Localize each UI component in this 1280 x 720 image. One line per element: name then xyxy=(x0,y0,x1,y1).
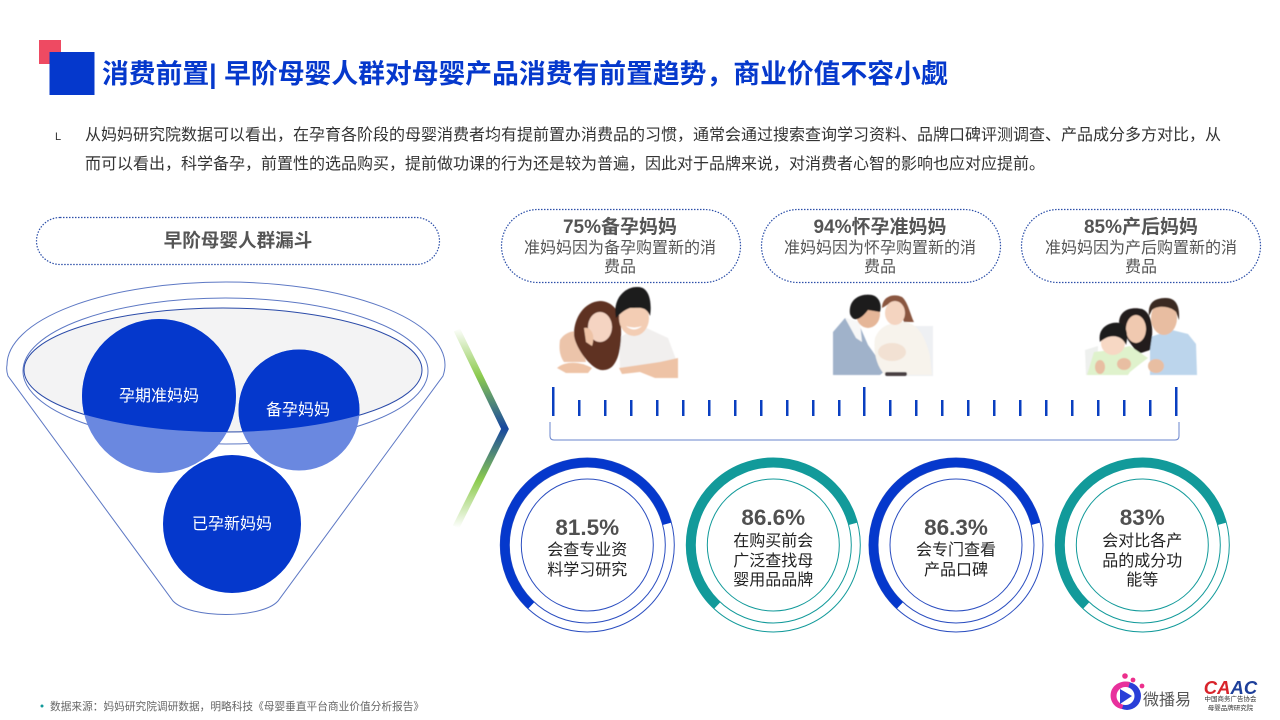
funnel middle rim xyxy=(23,298,428,444)
ring stat: 86.6%: 广泛查找母 xyxy=(733,552,813,570)
arrow: gradient chevron xyxy=(456,330,505,527)
circle: 备孕妈妈 xyxy=(238,350,360,470)
ring stat: 83%: 能等 xyxy=(1126,571,1158,589)
panel: funnel heading pill xyxy=(36,218,440,264)
ring stat: 86.3% xyxy=(869,458,1043,632)
ring stat: 86.3%: 86.3% xyxy=(924,515,988,540)
ring stat: 83%: 83% xyxy=(1120,505,1165,530)
callout: 85%产后妈妈: 85%产后妈妈 xyxy=(1084,216,1198,238)
ring stat: 81.5%: 料学习研究 xyxy=(547,561,627,579)
ring stat: 81.5%: 81.5% xyxy=(555,515,619,540)
callout: 94%怀孕准妈妈: 94%怀孕准妈妈 xyxy=(813,216,947,238)
funnel chart xyxy=(7,282,445,614)
logo: CAAC: 中国商务广告协会 xyxy=(1204,694,1257,703)
intro text block: L xyxy=(55,131,61,143)
photo: young couple xyxy=(557,287,678,378)
intro text block: 而可以看出，科学备孕，前置性的选品购买，提前做功课的行为还是较为普遍，因此对于品牌来说，对消费者心智的影响也应对应提前。 xyxy=(85,154,1045,173)
funnel outline xyxy=(7,282,445,614)
circle: 已孕新妈妈: 已孕新妈妈 xyxy=(192,515,272,533)
ring stat: 81.5% xyxy=(500,458,674,632)
intro text block: 从妈妈研究院数据可以看出，在孕育各阶段的母婴消费者均有提前置办消费品的习惯，通常会通过搜索查询学习资料、品牌口碑评测调查、产品成分多方对比，从 xyxy=(85,126,1221,144)
callout: 75%备孕妈妈: 费品 xyxy=(604,258,636,276)
photo: expecting couple xyxy=(833,295,933,376)
callout: 94%怀孕准妈妈: 准妈妈因为怀孕购置新的消 xyxy=(784,239,976,257)
logo: CAAC xyxy=(1204,677,1258,712)
callout: 94%怀孕准妈妈 xyxy=(762,210,1000,282)
photo: family with child xyxy=(1085,298,1197,375)
ring stat: 86.3%: 会专门查看 xyxy=(916,541,996,559)
icon: title squares xyxy=(39,40,94,95)
logo: CAAC: 母婴品牌研究院 xyxy=(1208,703,1254,712)
ring stat: 83% xyxy=(1055,458,1229,632)
callout: 94%怀孕准妈妈: 费品 xyxy=(864,258,896,276)
ring stat: 81.5%: 会查专业资 xyxy=(547,541,627,559)
timeline ruler xyxy=(552,387,1178,416)
ring stat: 86.3%: 产品口碑 xyxy=(924,561,988,579)
callout: 75%备孕妈妈: 准妈妈因为备孕购置新的消 xyxy=(524,239,716,257)
footer source note: 数据来源：妈妈研究院调研数据，明略科技《母婴垂直平台商业价值分析报告》 xyxy=(50,700,424,713)
logo: CAAC: CAAC xyxy=(1204,677,1258,698)
ring stat: 86.6%: 婴用品品牌 xyxy=(733,571,813,589)
ring stat: 86.6%: 在购买前会 xyxy=(733,532,813,550)
circle: 孕期准妈妈: 孕期准妈妈 xyxy=(119,387,199,405)
circle: 已孕新妈妈 xyxy=(163,455,301,593)
callout: 75%备孕妈妈: 75%备孕妈妈 xyxy=(563,216,677,238)
callout: 85%产后妈妈 xyxy=(1022,210,1260,282)
logo: 微播易 xyxy=(1111,673,1191,710)
ring stat: 86.6% xyxy=(686,458,860,632)
panel: funnel heading pill: 早阶母婴人群漏斗 xyxy=(164,230,312,251)
ring stat: 83%: 品的成分功 xyxy=(1102,552,1182,570)
intro text block xyxy=(55,126,1221,173)
logo: 微播易: 微播易 xyxy=(1143,691,1191,709)
funnel inner bowl xyxy=(24,308,422,432)
callout: 75%备孕妈妈 xyxy=(502,210,740,282)
callout: 85%产后妈妈: 准妈妈因为产后购置新的消 xyxy=(1045,239,1237,257)
title: 消费前置| 早阶母婴人群对母婴产品消费有前置趋势，商业价值不容小觑 xyxy=(102,59,948,89)
ring stat: 86.6%: 86.6% xyxy=(741,505,805,530)
timeline bracket xyxy=(550,422,1179,440)
circle: 备孕妈妈: 备孕妈妈 xyxy=(266,401,330,419)
ring stat: 83%: 会对比各产 xyxy=(1102,532,1182,550)
circle: 孕期准妈妈 xyxy=(82,319,236,473)
callout: 85%产后妈妈: 费品 xyxy=(1125,258,1157,276)
